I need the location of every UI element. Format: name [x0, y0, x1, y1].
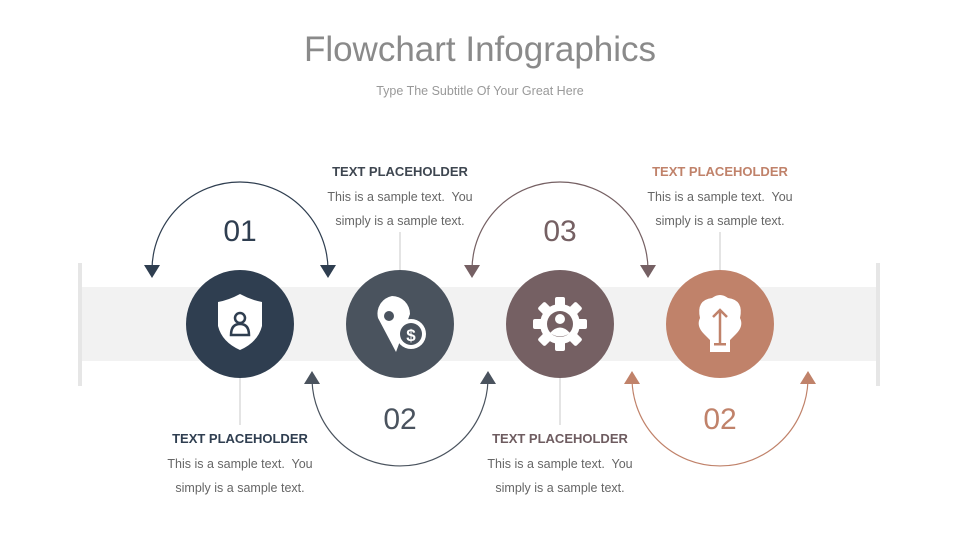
arc 01: 01 [223, 215, 257, 248]
connectors [240, 232, 720, 425]
text block 4 top [647, 164, 793, 228]
text block 4 top: This is a sample text. You simply is a sample text. [647, 190, 793, 228]
circle 4 brain bulb icon [666, 270, 774, 378]
arc 02: 02 [383, 403, 417, 436]
circle 2 location dollar icon [346, 270, 454, 378]
text block 1 bottom: This is a sample text. You simply is a sample text. [167, 457, 313, 495]
title: Flowchart Infographics [304, 30, 656, 69]
circle 2 location dollar icon: $ [406, 326, 416, 345]
subtitle: Type The Subtitle Of Your Great Here [376, 84, 584, 98]
text block 3 bottom [487, 431, 633, 495]
arc 02 [304, 371, 496, 466]
arc 04 [624, 371, 816, 466]
text block 2 top: TEXT PLACEHOLDER [332, 164, 468, 179]
circle 1 shield icon [186, 270, 294, 378]
circle 3 gear icon [506, 270, 614, 378]
arc 04: 02 [703, 403, 737, 436]
text block 3 bottom: This is a sample text. You simply is a sample text. [487, 457, 633, 495]
text block 3 bottom: TEXT PLACEHOLDER [492, 431, 628, 446]
arc 03: 03 [543, 215, 577, 248]
text block 2 top [327, 164, 473, 228]
text block 1 bottom [167, 431, 313, 495]
band [78, 263, 880, 386]
arc 03 [464, 182, 656, 278]
text block 2 top: This is a sample text. You simply is a sample text. [327, 190, 473, 228]
text block 1 bottom: TEXT PLACEHOLDER [172, 431, 308, 446]
text block 4 top: TEXT PLACEHOLDER [652, 164, 788, 179]
arc 01 [144, 182, 336, 278]
